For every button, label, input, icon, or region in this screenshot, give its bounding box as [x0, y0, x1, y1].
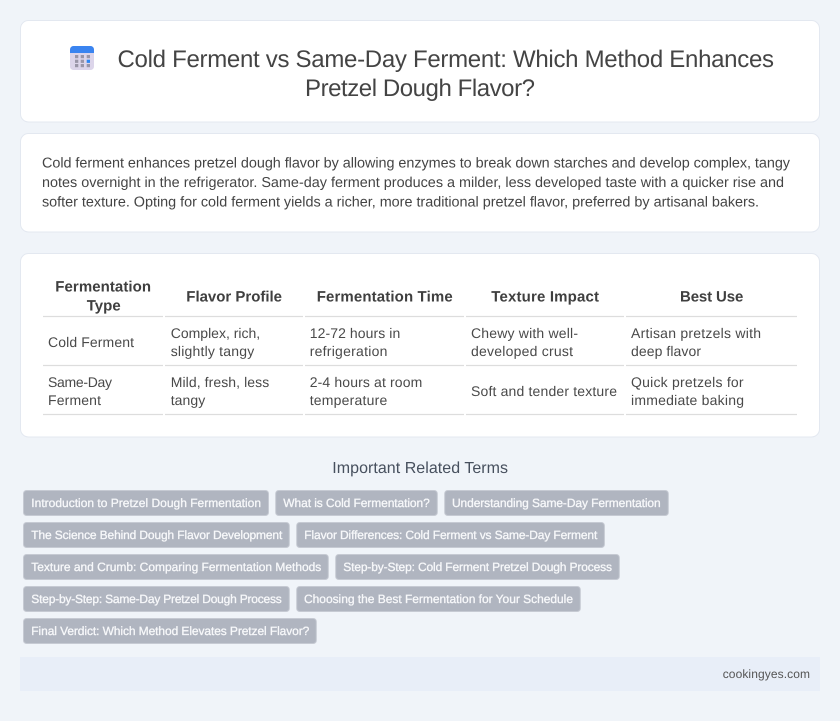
tag — [445, 490, 668, 516]
table row: cold ferment: developed crust — [471, 343, 573, 359]
panel: introduction paragraph: softer texture. Opting for cold ferment yields a richer, more traditional pretzel flavor, preferred by artisanal bakers. — [42, 194, 759, 210]
table header row: Flavor Profile — [186, 289, 282, 306]
tag: The Science Behind Dough Flavor Development — [31, 528, 283, 542]
table row: same-day ferment: Soft and tender texture — [471, 383, 617, 399]
table row: same-day ferment: Ferment — [48, 392, 101, 408]
title — [118, 46, 774, 102]
heading: important related terms: Important Related Terms — [332, 460, 508, 477]
icon: calendar — [70, 46, 94, 70]
tag: Texture and Crumb: Comparing Fermentation Methods — [31, 560, 321, 574]
tag — [24, 554, 328, 580]
panel: comparison table — [20, 254, 820, 437]
table header row: Type — [87, 298, 121, 315]
related term tags — [24, 490, 668, 644]
tag: Choosing the Best Fermentation for Your Schedule — [304, 592, 573, 606]
table row: same-day ferment: tangy — [171, 392, 205, 408]
tag — [336, 554, 619, 580]
table header row: Fermentation Time — [317, 289, 453, 306]
title: Pretzel Dough Flavor? — [305, 75, 535, 102]
tag: What is Cold Fermentation? — [283, 496, 430, 510]
title: Cold Ferment vs Same-Day Ferment: Which Method Enhances — [118, 46, 774, 73]
table row: same-day ferment — [48, 374, 744, 408]
tag — [24, 586, 289, 612]
tag — [297, 522, 604, 548]
table header row — [55, 279, 743, 315]
table row: cold ferment: Cold Ferment — [48, 334, 134, 350]
tag: Step-by-Step: Same-Day Pretzel Dough Process — [31, 592, 282, 606]
table row: cold ferment: refrigeration — [310, 343, 387, 359]
tag — [24, 618, 316, 644]
panel: header — [20, 20, 820, 122]
table row: same-day ferment: immediate baking — [631, 392, 744, 408]
tag — [24, 522, 289, 548]
table header row: Best Use — [680, 289, 743, 306]
tag — [276, 490, 437, 516]
panel: introduction paragraph — [20, 134, 820, 232]
panel: introduction paragraph: Cold ferment enhances pretzel dough flavor by allowing enzymes to break down starches and develop complex, tangy — [42, 155, 791, 171]
table header row: Texture Impact — [491, 289, 599, 306]
table row: cold ferment: deep flavor — [631, 343, 701, 359]
table row: cold ferment: 12-72 hours in — [310, 325, 400, 341]
footer bar — [20, 657, 820, 691]
table row: same-day ferment: Quick pretzels for — [631, 374, 744, 390]
table row: same-day ferment: Same-Day — [48, 374, 112, 390]
table row: same-day ferment: Mild, fresh, less — [171, 374, 269, 390]
tag: Final Verdict: Which Method Elevates Pretzel Flavor? — [31, 624, 310, 638]
footer bar: cookingyes.com — [723, 667, 810, 681]
table row: cold ferment: Chewy with well- — [471, 325, 578, 341]
table header row: Fermentation — [55, 279, 151, 296]
tag: Understanding Same-Day Fermentation — [452, 496, 661, 510]
tag: Step-by-Step: Cold Ferment Pretzel Dough Process — [343, 560, 612, 574]
table row: cold ferment: Artisan pretzels with — [631, 325, 761, 341]
table row: same-day ferment: 2-4 hours at room — [310, 374, 422, 390]
table row: cold ferment: slightly tangy — [171, 343, 254, 359]
tag: Flavor Differences: Cold Ferment vs Same-Day Ferment — [304, 528, 598, 542]
tag: Introduction to Pretzel Dough Fermentation — [31, 496, 261, 510]
tag — [24, 490, 268, 516]
table row: cold ferment — [48, 325, 761, 359]
tag — [297, 586, 580, 612]
table row: same-day ferment: temperature — [310, 392, 388, 408]
table row: cold ferment: Complex, rich, — [171, 325, 260, 341]
panel: introduction paragraph: notes overnight in the refrigerator. Same-day ferment produces a milder, less developed taste with a quicker rise and — [42, 175, 784, 191]
